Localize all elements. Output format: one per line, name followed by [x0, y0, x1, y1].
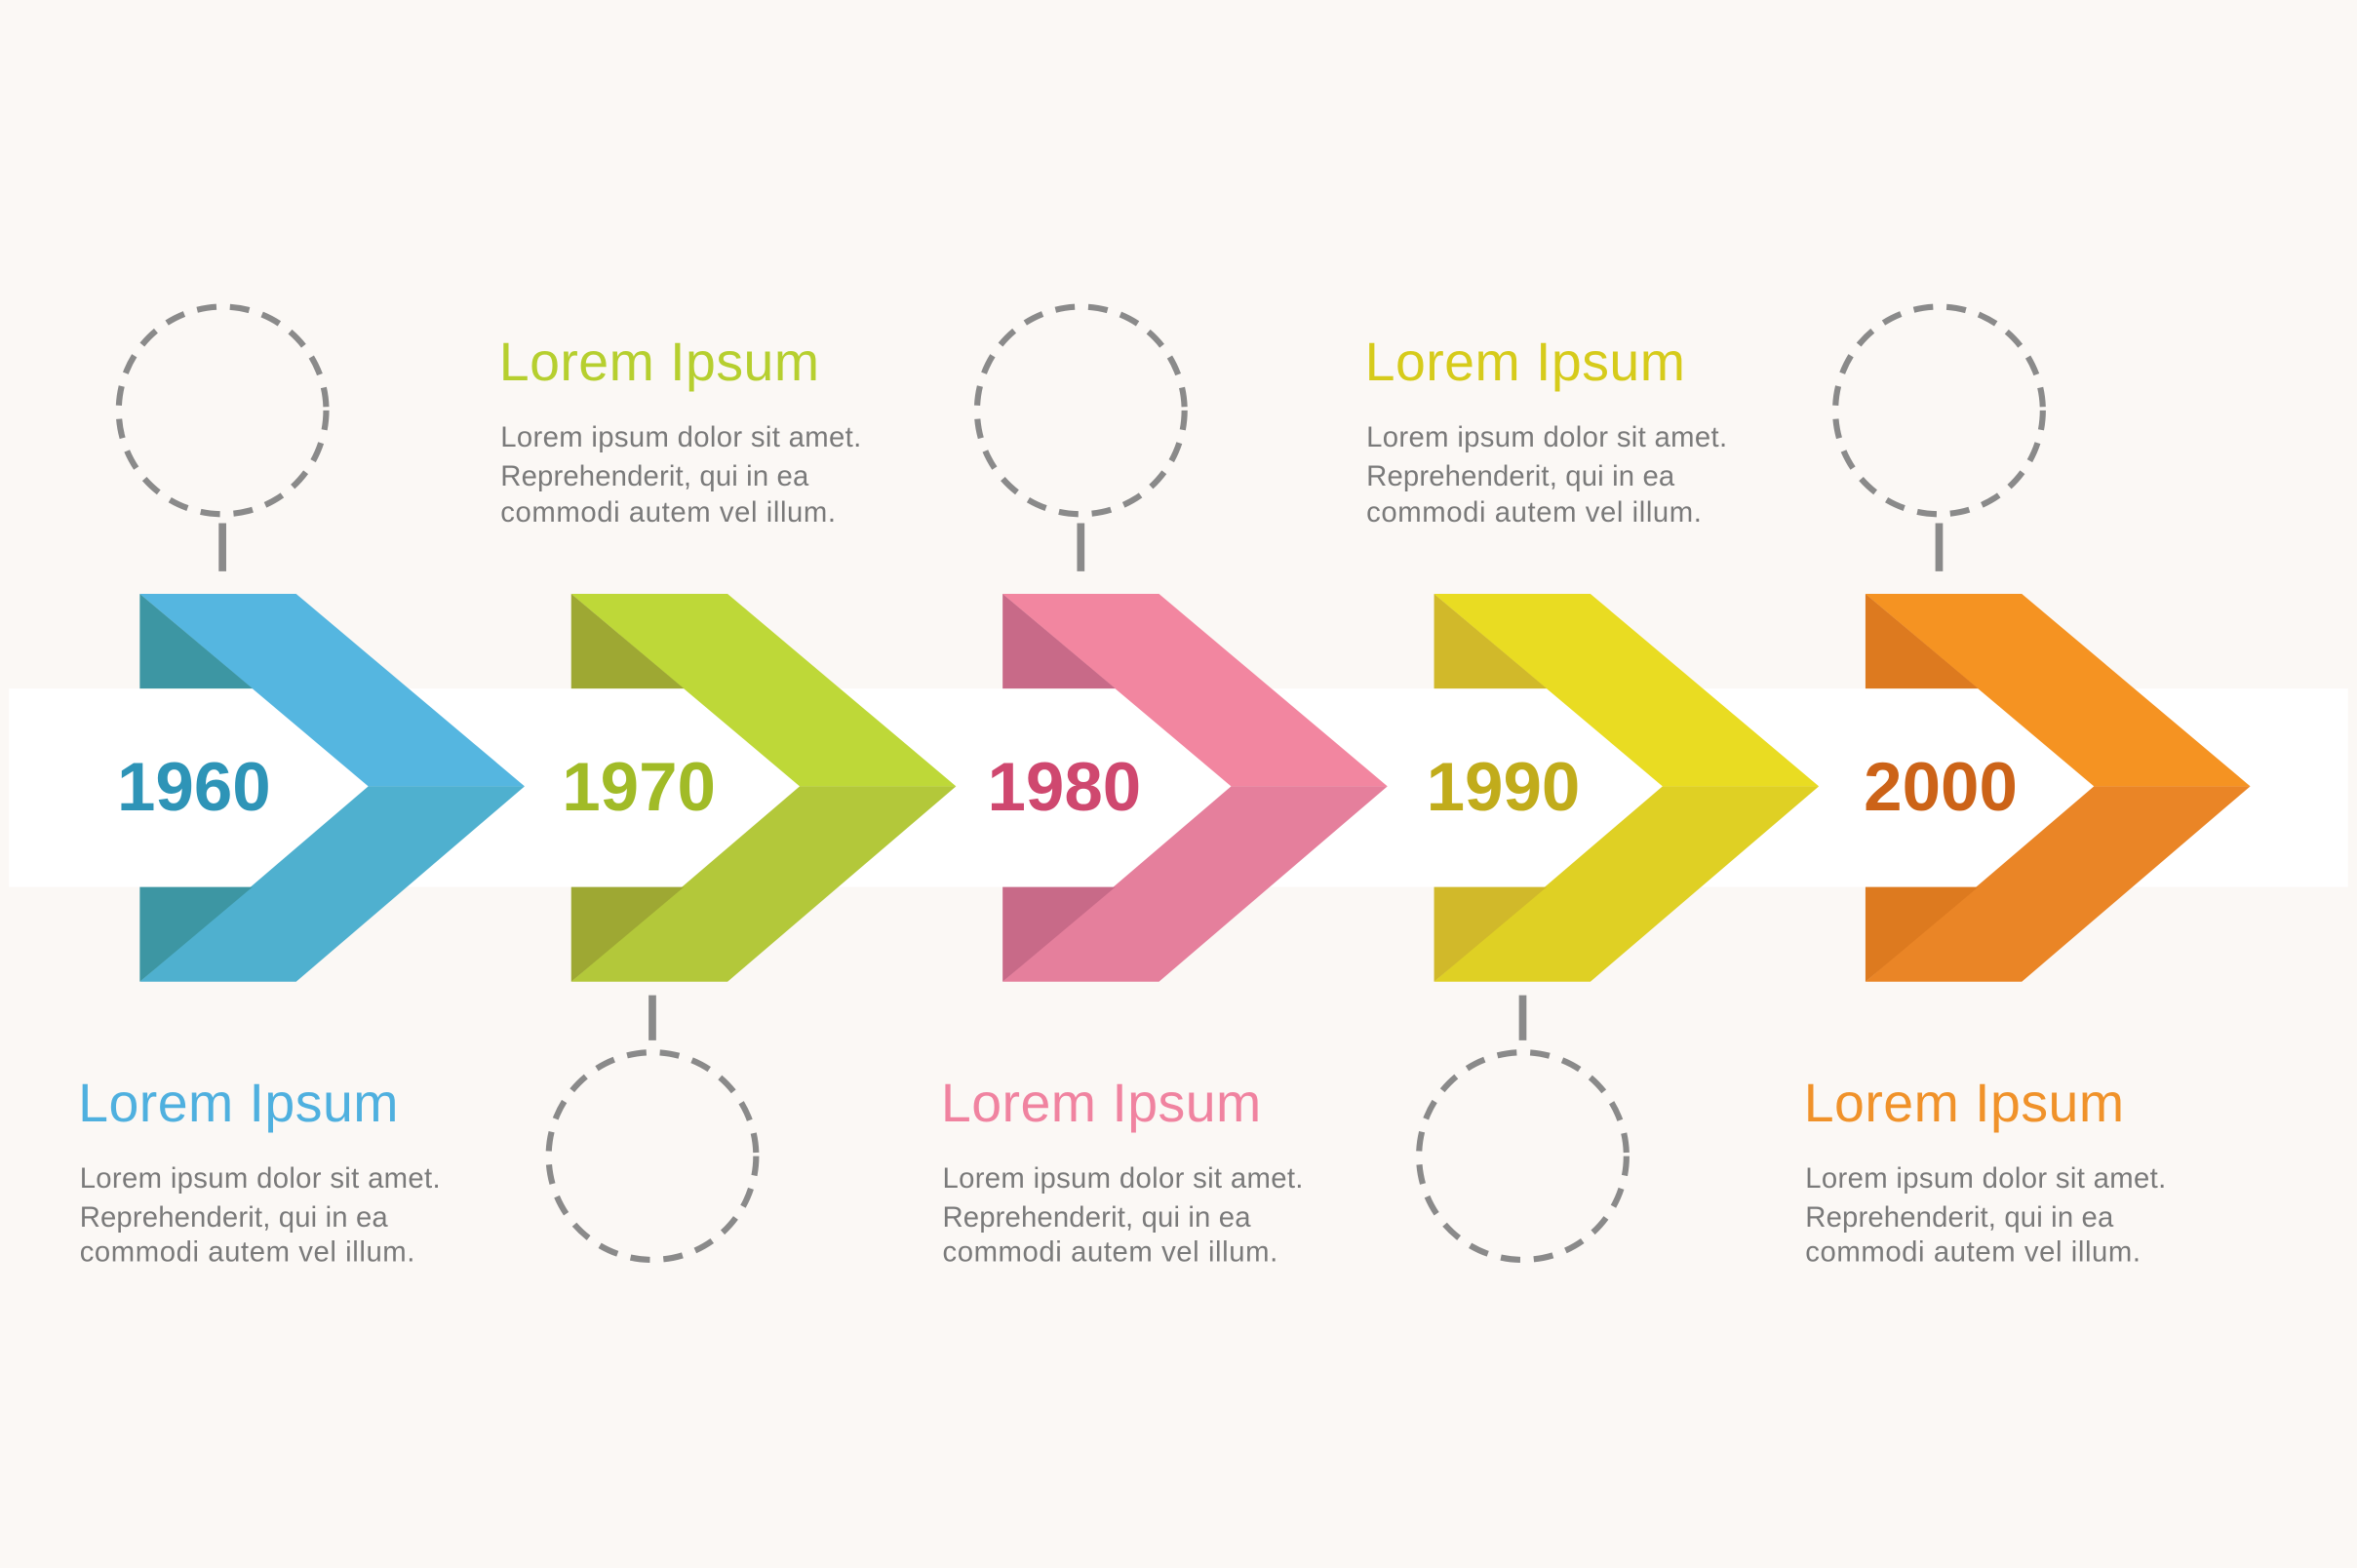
- text 1960: Lorem ipsum dolor sit amet.: [80, 1162, 441, 1195]
- chevron 2000: [1864, 594, 2251, 982]
- text 1980: [941, 1073, 1303, 1268]
- text 1980: Lorem ipsum dolor sit amet.: [942, 1162, 1303, 1195]
- text 1980: Reprehenderit, qui in ea: [942, 1201, 1251, 1234]
- text 1990: Lorem ipsum dolor sit amet.: [1366, 421, 1727, 453]
- chevron 1970: 1970: [562, 749, 716, 826]
- chevron 1980: [987, 594, 1388, 982]
- chevron 1960: 1960: [117, 749, 271, 826]
- text 1980: Lorem Ipsum: [941, 1073, 1261, 1133]
- text 1960: commodi autem vel illum.: [80, 1235, 414, 1268]
- text 2000: Lorem ipsum dolor sit amet.: [1805, 1162, 2166, 1195]
- text 1960: [78, 1073, 441, 1268]
- white timeline band: [9, 688, 2348, 887]
- chevron 1990: 1990: [1427, 749, 1580, 826]
- chevron 1990: [1427, 594, 1819, 982]
- chevron 2000: 2000: [1864, 749, 2018, 826]
- chevron 1960: [117, 594, 525, 982]
- text 1970: Lorem Ipsum: [499, 332, 819, 392]
- text 1980: commodi autem vel illum.: [942, 1235, 1277, 1268]
- chevron 1980: 1980: [987, 749, 1141, 826]
- circle 1990: [1419, 996, 1627, 1260]
- circle 2000: [1835, 307, 2043, 571]
- text 1990: Reprehenderit, qui in ea: [1366, 460, 1675, 492]
- text 2000: Lorem Ipsum: [1804, 1073, 2124, 1133]
- chevron 1970: [562, 594, 956, 982]
- text 1990: commodi autem vel illum.: [1366, 496, 1702, 529]
- text 2000: Reprehenderit, qui in ea: [1805, 1201, 2114, 1234]
- circle 1970: [549, 996, 756, 1260]
- text 2000: commodi autem vel illum.: [1805, 1235, 2141, 1268]
- text 1990: [1365, 332, 1727, 529]
- text 1990: Lorem Ipsum: [1365, 332, 1685, 392]
- text 2000: [1804, 1073, 2166, 1268]
- circle 1960: [119, 307, 326, 571]
- circle 1980: [977, 307, 1185, 571]
- text 1970: [499, 332, 861, 529]
- text 1960: Lorem Ipsum: [78, 1073, 398, 1133]
- text 1970: commodi autem vel illum.: [500, 496, 836, 529]
- text 1970: Reprehenderit, qui in ea: [500, 460, 809, 492]
- text 1960: Reprehenderit, qui in ea: [80, 1201, 388, 1234]
- text 1970: Lorem ipsum dolor sit amet.: [500, 421, 861, 453]
